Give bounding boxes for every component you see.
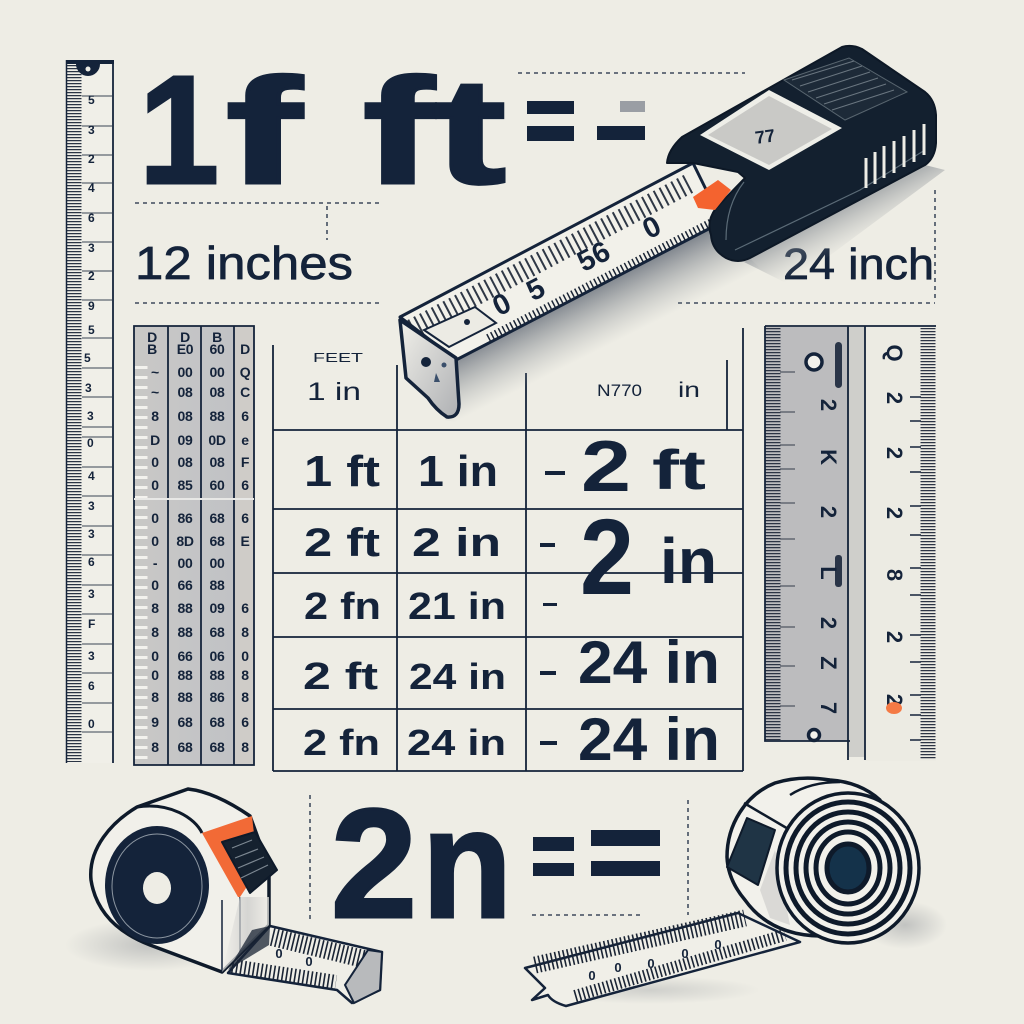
row 2 xyxy=(304,496,717,617)
gray number chart: ~ xyxy=(151,384,159,400)
row 5 xyxy=(303,706,720,773)
right tape blade: 0 xyxy=(681,946,689,961)
bottom label: 2n equals: 2 xyxy=(331,777,417,950)
gray number chart: E xyxy=(240,533,250,549)
gray number chart: 86 xyxy=(178,510,193,526)
right steel ruler xyxy=(765,326,936,761)
gray number chart: 68 xyxy=(178,739,193,755)
left tape shadow xyxy=(65,919,235,971)
gray number chart: 8 xyxy=(151,600,159,616)
gray number chart: 68 xyxy=(178,714,193,730)
left vertical ruler: 3 xyxy=(88,587,95,601)
tape blade: 0 xyxy=(487,287,516,323)
gray number chart: 8 xyxy=(151,624,159,640)
row 5: 24 in xyxy=(407,722,506,763)
title: 1 ft: f xyxy=(226,47,304,215)
bottom right tape measure xyxy=(525,778,947,1006)
tape blade: 56 xyxy=(572,235,616,279)
left tape case xyxy=(91,789,270,972)
gray number chart: 0 xyxy=(151,477,159,493)
gray number chart: 68 xyxy=(210,533,225,549)
row 3: 21 in xyxy=(408,586,506,628)
row 1: 2 xyxy=(581,427,631,507)
gray number chart: 88 xyxy=(178,624,193,640)
row 3: 2 fn xyxy=(304,586,381,628)
label: 24 inch: 24 inch xyxy=(783,240,934,289)
gray number chart: 88 xyxy=(178,689,193,705)
gray number chart: 0 xyxy=(151,454,159,470)
left vertical ruler: 2 xyxy=(88,152,95,166)
gray number chart: 88 xyxy=(210,667,225,683)
row 1: 1 in xyxy=(418,447,498,496)
gray number chart: 09 xyxy=(210,600,225,616)
right steel ruler: 2 xyxy=(882,507,907,519)
left vertical ruler: 6 xyxy=(88,679,95,693)
tape blade: 5 xyxy=(521,272,550,308)
left vertical ruler: 3 xyxy=(88,123,95,137)
left vertical ruler: 4 xyxy=(88,181,95,195)
gray number chart: 00 xyxy=(178,555,193,571)
table header: FEET xyxy=(313,350,363,365)
gray number chart: 0 xyxy=(151,577,159,593)
left vertical ruler: 3 xyxy=(88,527,95,541)
row 1 xyxy=(304,427,706,507)
gray number chart: 00 xyxy=(178,364,193,380)
right tape case xyxy=(727,778,880,936)
right steel ruler: 2 xyxy=(882,694,907,706)
orange lock button xyxy=(693,180,731,210)
left vertical ruler: 5 xyxy=(88,93,95,107)
dashed guide lines, bottom xyxy=(310,795,688,922)
gray number chart: 08 xyxy=(178,408,193,424)
tape shadow xyxy=(445,225,760,425)
row 4: 2 ft xyxy=(303,656,378,698)
gray number chart: 06 xyxy=(210,648,225,664)
left vertical ruler: 2 xyxy=(88,269,95,283)
tape blade: 0 xyxy=(637,210,666,246)
left vertical ruler: 5 xyxy=(88,323,95,337)
gray number chart: 88 xyxy=(178,667,193,683)
case display screen xyxy=(700,90,842,170)
row 1: 1 ft xyxy=(304,447,380,496)
row 4: 24 in xyxy=(578,629,720,696)
row 1: ft xyxy=(652,438,706,501)
right tape shadow xyxy=(863,901,947,949)
gray number chart: 08 xyxy=(210,384,225,400)
gray number chart: D xyxy=(147,329,157,345)
gray number chart: 86 xyxy=(210,689,225,705)
gray number chart: 8 xyxy=(151,739,159,755)
gray number chart: 66 xyxy=(178,577,193,593)
right steel ruler: K xyxy=(816,449,841,465)
gray number chart: B xyxy=(212,329,222,345)
gray number chart: 0 xyxy=(151,533,159,549)
case vents xyxy=(866,124,924,188)
right steel ruler: 7 xyxy=(816,702,841,714)
gray number chart: - xyxy=(153,555,158,571)
gray number chart: ~ xyxy=(151,364,159,380)
left vertical ruler: 3 xyxy=(88,499,95,513)
gray number chart: 6 xyxy=(241,714,249,730)
right steel ruler: 2 xyxy=(816,399,841,411)
left vertical ruler: 6 xyxy=(88,555,95,569)
right steel ruler: 2 xyxy=(816,617,841,629)
left vertical ruler: 3 xyxy=(85,381,92,395)
right tape lock button xyxy=(727,818,775,885)
row 2: 2 ft xyxy=(304,521,380,565)
gray number chart: 8D xyxy=(176,533,194,549)
right tape blade: 0 xyxy=(614,960,622,975)
left vertical ruler: 0 xyxy=(88,717,95,731)
gray number chart: 68 xyxy=(210,739,225,755)
gray number chart: 0 xyxy=(151,667,159,683)
right steel ruler: 2 xyxy=(882,631,907,643)
gray number chart: 08 xyxy=(178,454,193,470)
gray number chart: 08 xyxy=(178,384,193,400)
left vertical ruler xyxy=(66,60,114,763)
gray number chart: 88 xyxy=(210,577,225,593)
gray number chart: 88 xyxy=(178,600,193,616)
gray number chart: 60 xyxy=(210,477,225,493)
gray number chart: F xyxy=(241,454,250,470)
left tape orange panel xyxy=(202,816,258,897)
gray number chart: 68 xyxy=(210,624,225,640)
left vertical ruler: 0 xyxy=(87,436,94,450)
tape case xyxy=(667,46,936,261)
table header xyxy=(307,350,700,406)
gray number chart: 09 xyxy=(178,432,193,448)
left vertical ruler: 3 xyxy=(87,409,94,423)
gray number chart: 9 xyxy=(151,714,159,730)
right steel ruler: 2 xyxy=(816,506,841,518)
bottom left tape measure xyxy=(65,789,382,1003)
row 3 xyxy=(304,586,557,628)
right tape blade: 0 xyxy=(714,937,722,952)
gray number chart: e xyxy=(241,432,249,448)
left vertical ruler: 3 xyxy=(88,649,95,663)
left vertical ruler: 3 xyxy=(88,241,95,255)
gray number chart: 60 xyxy=(210,341,225,357)
table header: in xyxy=(678,379,700,402)
gray number chart: D xyxy=(240,341,250,357)
gray number chart: 8 xyxy=(241,667,249,683)
left vertical ruler: 5 xyxy=(84,351,91,365)
equals sign and dash xyxy=(527,101,645,141)
right tape blade: 0 xyxy=(647,956,655,971)
gray number chart: 68 xyxy=(210,714,225,730)
table header: N770 xyxy=(597,381,642,400)
title: 1 ft: ft xyxy=(363,47,506,215)
left tape lock button xyxy=(222,832,277,893)
left vertical ruler: 4 xyxy=(88,469,95,483)
gray number chart: Q xyxy=(240,364,251,380)
gray number chart: 68 xyxy=(210,510,225,526)
gray number chart: 8 xyxy=(151,689,159,705)
right steel ruler: L xyxy=(816,566,841,580)
gray number chart: 6 xyxy=(241,408,249,424)
gray number chart: B xyxy=(147,341,157,357)
tape blade xyxy=(400,163,722,360)
bottom label: 2n equals xyxy=(331,777,660,950)
case grip xyxy=(784,58,907,120)
row 2: 2 in xyxy=(412,521,501,565)
gray number chart: 88 xyxy=(210,408,225,424)
left vertical ruler: 6 xyxy=(88,211,95,225)
left vertical ruler: 9 xyxy=(88,299,95,313)
dashed guide lines, top xyxy=(135,73,935,303)
gray number chart: E0 xyxy=(177,341,194,357)
left tape dial xyxy=(105,826,209,944)
row 4: 24 in xyxy=(409,656,506,697)
right tape blade: 0 xyxy=(588,968,596,983)
right tape coil xyxy=(777,793,919,943)
row 5: 24 in xyxy=(578,706,720,773)
title: 1 ft: 1 xyxy=(139,44,219,216)
gray number chart: 66 xyxy=(178,648,193,664)
label: 12 inches: 12 inches xyxy=(135,237,353,289)
gray number chart: D xyxy=(180,329,190,345)
gray number chart: 8 xyxy=(151,408,159,424)
right steel ruler: 2 xyxy=(882,447,907,459)
table grid xyxy=(273,328,743,771)
gray number chart: 00 xyxy=(210,364,225,380)
gray number chart: 8 xyxy=(241,689,249,705)
row 2: 2 xyxy=(580,496,634,617)
gray number chart: 0D xyxy=(208,432,226,448)
right steel ruler: Z xyxy=(816,656,841,670)
case shadow xyxy=(744,165,945,285)
gray number chart: 8 xyxy=(241,624,249,640)
left vertical ruler: F xyxy=(88,617,95,631)
gray number chart: 08 xyxy=(210,454,225,470)
gray number chart: 8 xyxy=(241,739,249,755)
gray number chart: 0 xyxy=(151,648,159,664)
gray number chart: 6 xyxy=(241,477,249,493)
gray number chart: 6 xyxy=(241,600,249,616)
left tape blade: 0 xyxy=(275,946,283,961)
left tape blade xyxy=(228,926,382,1003)
top tape measure xyxy=(400,46,945,425)
row 5: 2 fn xyxy=(303,722,380,763)
gray number chart xyxy=(134,326,254,765)
row 2: in xyxy=(660,525,717,597)
left tape blade: 0 xyxy=(305,954,313,969)
gray number chart: 85 xyxy=(178,477,193,493)
gray number chart: 0 xyxy=(151,510,159,526)
conversion table xyxy=(273,328,743,773)
row 4 xyxy=(303,629,720,698)
table header: 1 in xyxy=(307,378,361,406)
right steel ruler: 8 xyxy=(882,569,907,581)
tape hook xyxy=(400,307,496,417)
right steel ruler: Q xyxy=(882,344,907,362)
gray number chart: 00 xyxy=(210,555,225,571)
right tape blade xyxy=(525,913,800,1006)
gray number chart: C xyxy=(240,384,250,400)
case display screen: 77 xyxy=(754,125,776,148)
bottom label: 2n equals: n xyxy=(422,777,512,950)
gray number chart: D xyxy=(150,432,160,448)
gray number chart: 0 xyxy=(241,648,249,664)
right steel ruler: 2 xyxy=(882,392,907,404)
gray number chart: 6 xyxy=(241,510,249,526)
title: 1 ft xyxy=(139,44,506,216)
